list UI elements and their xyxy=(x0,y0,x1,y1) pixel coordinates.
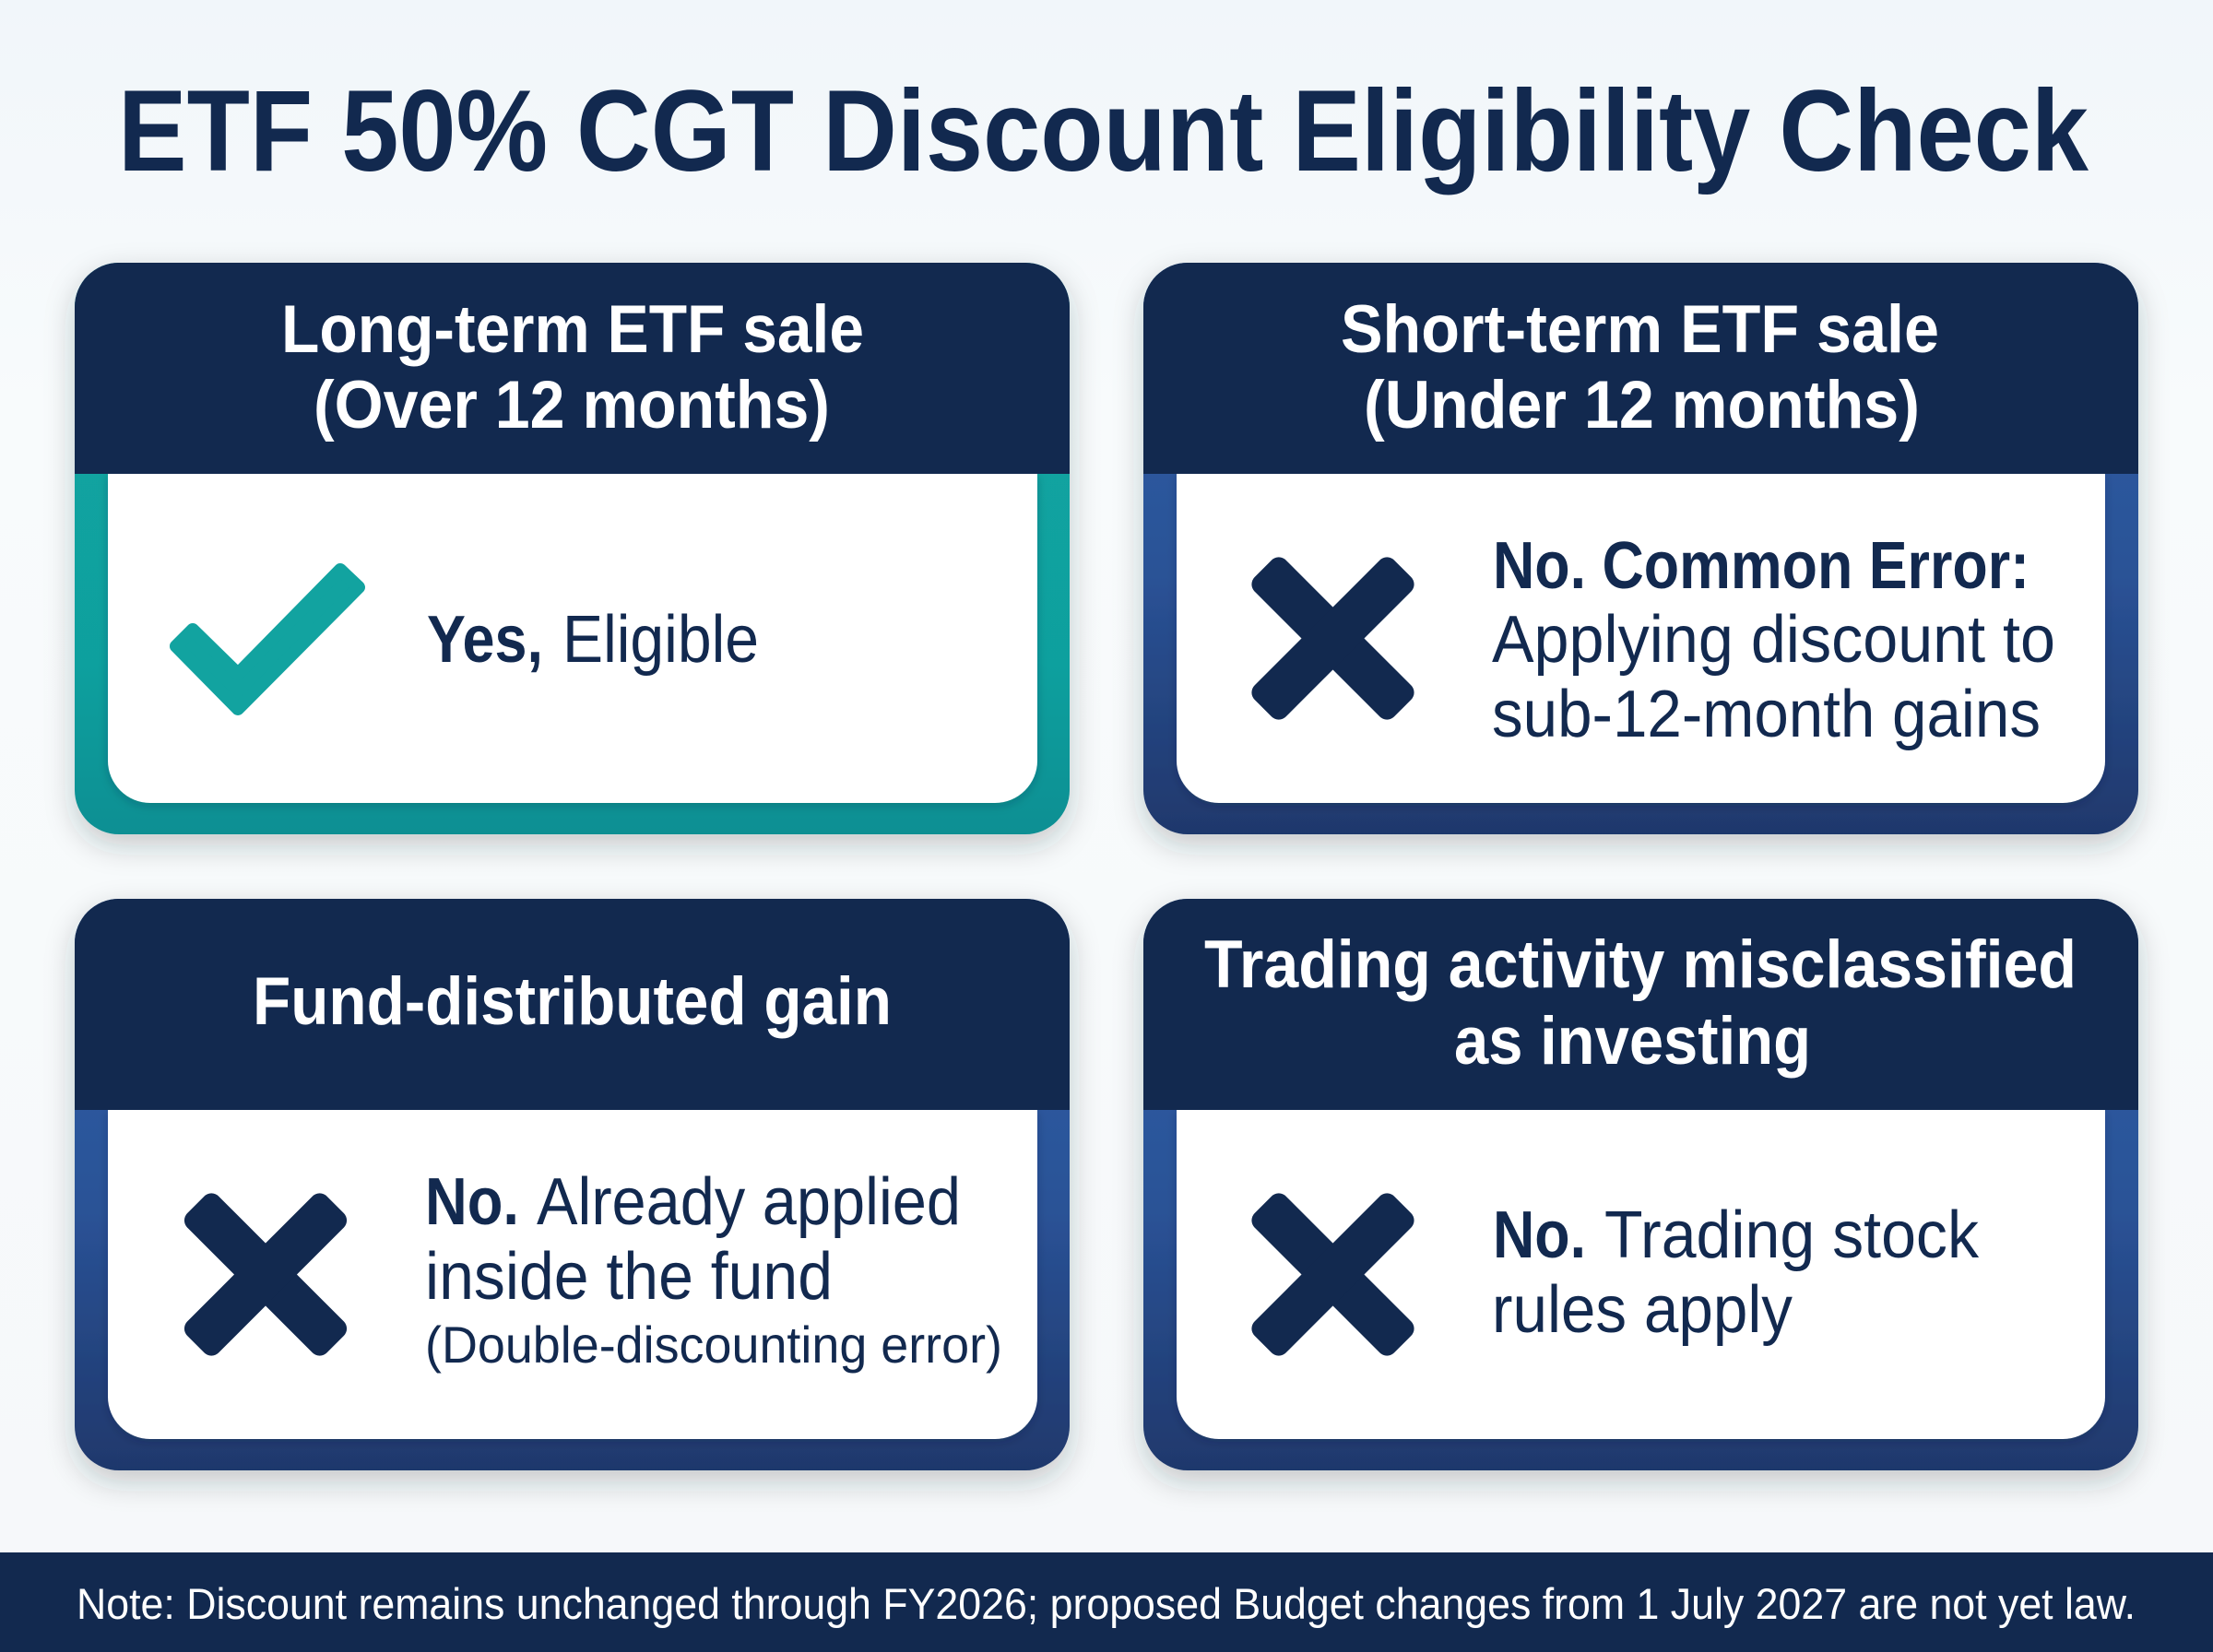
icon: cross xyxy=(1193,499,1473,778)
header: trading activity misclassified: Trading activity misclassified xyxy=(1204,927,2077,1002)
header: short-term ETF sale: Short-term ETF sale xyxy=(1341,292,1939,367)
text: common error: No. Common Error: xyxy=(1493,529,2030,603)
header: short-term ETF sale xyxy=(1143,263,2138,474)
header: long-term ETF sale xyxy=(75,263,1070,474)
panel: long-term ETF sale xyxy=(75,263,1070,834)
header: long-term ETF sale: (Over 12 months) xyxy=(314,368,830,442)
panel: fund-distributed gain xyxy=(75,899,1070,1470)
header: trading activity misclassified xyxy=(1143,899,2138,1110)
text: yes, eligible: Eligible xyxy=(562,603,759,677)
icon: check mark xyxy=(176,570,359,709)
header: short-term ETF sale: (Under 12 months) xyxy=(1364,368,1920,442)
header: fund-distributed gain xyxy=(75,899,1070,1110)
text: trading stock rules: No. xyxy=(1493,1198,1586,1272)
text: already applied: Already applied xyxy=(537,1165,961,1239)
text: already applied xyxy=(425,1165,1002,1374)
panel: trading activity misclassified xyxy=(1143,899,2138,1470)
text: trading stock rules: rules apply xyxy=(1492,1273,1793,1347)
text: already applied: inside the fund xyxy=(425,1240,833,1314)
text: trading stock rules: Trading stock xyxy=(1604,1198,1980,1272)
footer note: Note: Discount remains unchanged through FY2026; proposed Budget changes from 1 July 2027 are not yet law. xyxy=(77,1579,2136,1628)
icon: cross xyxy=(1193,1135,1473,1414)
text: common error: sub-12-month gains xyxy=(1492,678,2041,751)
text: trading stock rules xyxy=(1492,1198,1980,1347)
icon: cross xyxy=(126,1135,405,1414)
text: common error: Applying discount to xyxy=(1492,603,2055,677)
header: fund-distributed gain: Fund-distributed gain xyxy=(253,964,892,1039)
panel: short-term ETF sale xyxy=(1143,263,2138,834)
text: already applied: (Double-discounting error) xyxy=(425,1316,1002,1374)
text: yes, eligible: Yes, xyxy=(427,603,543,677)
header: trading activity misclassified: as investing xyxy=(1454,1004,1811,1079)
text: already applied: No. xyxy=(425,1165,519,1239)
text: common error xyxy=(1492,529,2055,751)
text: yes, eligible xyxy=(427,603,759,677)
header: long-term ETF sale: Long-term ETF sale xyxy=(281,292,864,367)
footer note xyxy=(0,1552,2213,1652)
